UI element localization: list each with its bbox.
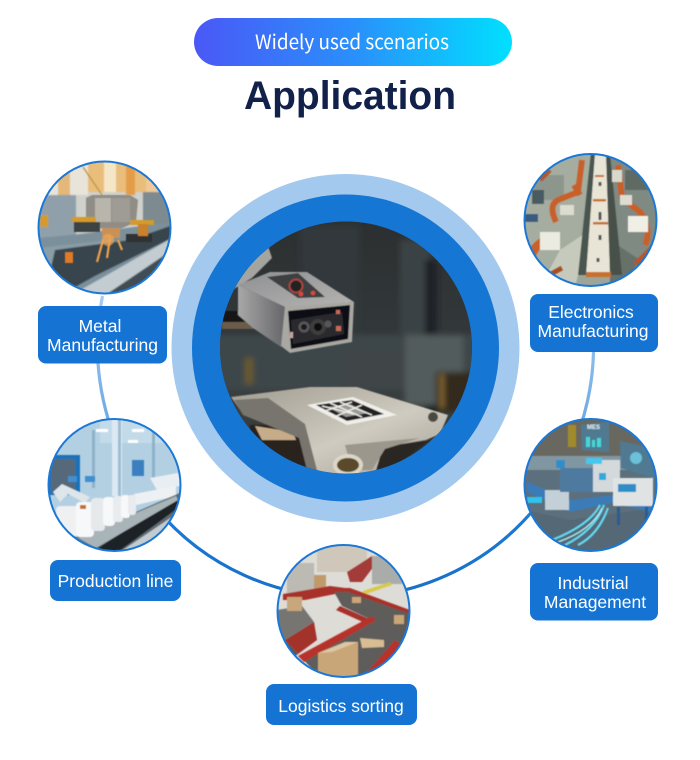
label: [530, 563, 658, 620]
scenario: Logistics sorting: [266, 544, 417, 725]
label: Manufacturing: [538, 321, 648, 341]
outer light ring: [172, 174, 520, 522]
photo: smart factory with MES dashboards: MES: [587, 425, 600, 431]
scenario: Industrial Management: [524, 418, 660, 620]
photo: robotic assembly line: [524, 153, 658, 287]
photo: parcel conveyors: [277, 544, 411, 678]
metal part: [231, 387, 448, 478]
label: Logistics sorting: [278, 696, 404, 716]
photo: bottle filling line: [48, 418, 182, 552]
header pill: Widely used scenarios: [194, 18, 512, 66]
photo border: [48, 419, 180, 551]
photo border: [524, 154, 656, 286]
photo border: [278, 545, 410, 677]
label: Metal: [79, 316, 121, 336]
label: [38, 306, 167, 364]
connecting arc: [97, 296, 593, 597]
title: Application: [244, 74, 456, 118]
camera mount: [221, 246, 354, 353]
scenario: Electronics Manufacturing: [524, 153, 658, 352]
photo border: [38, 162, 170, 294]
label: [530, 294, 658, 352]
photo: smart factory with MES dashboards: [524, 418, 660, 552]
inner blue ring: [192, 194, 499, 502]
label: [50, 560, 181, 601]
photo border: [524, 419, 656, 551]
scenario: Metal Manufacturing: [38, 160, 173, 364]
label: [266, 684, 417, 725]
label: Production line: [58, 571, 173, 591]
camera body: [238, 272, 354, 307]
QR label: [307, 397, 397, 425]
header pill: Widely used scenarios: Widely used scenarios: [255, 26, 449, 55]
label: Industrial: [557, 573, 629, 593]
label: Electronics: [548, 302, 634, 322]
scenario: Production line: [48, 418, 182, 601]
photo: scanner camera above metal part with QR code: [215, 218, 477, 478]
label: Manufacturing: [47, 335, 158, 355]
central circle with camera photo: [172, 174, 520, 522]
photo: laser cutting machine: [38, 160, 173, 296]
label: Management: [544, 592, 646, 612]
